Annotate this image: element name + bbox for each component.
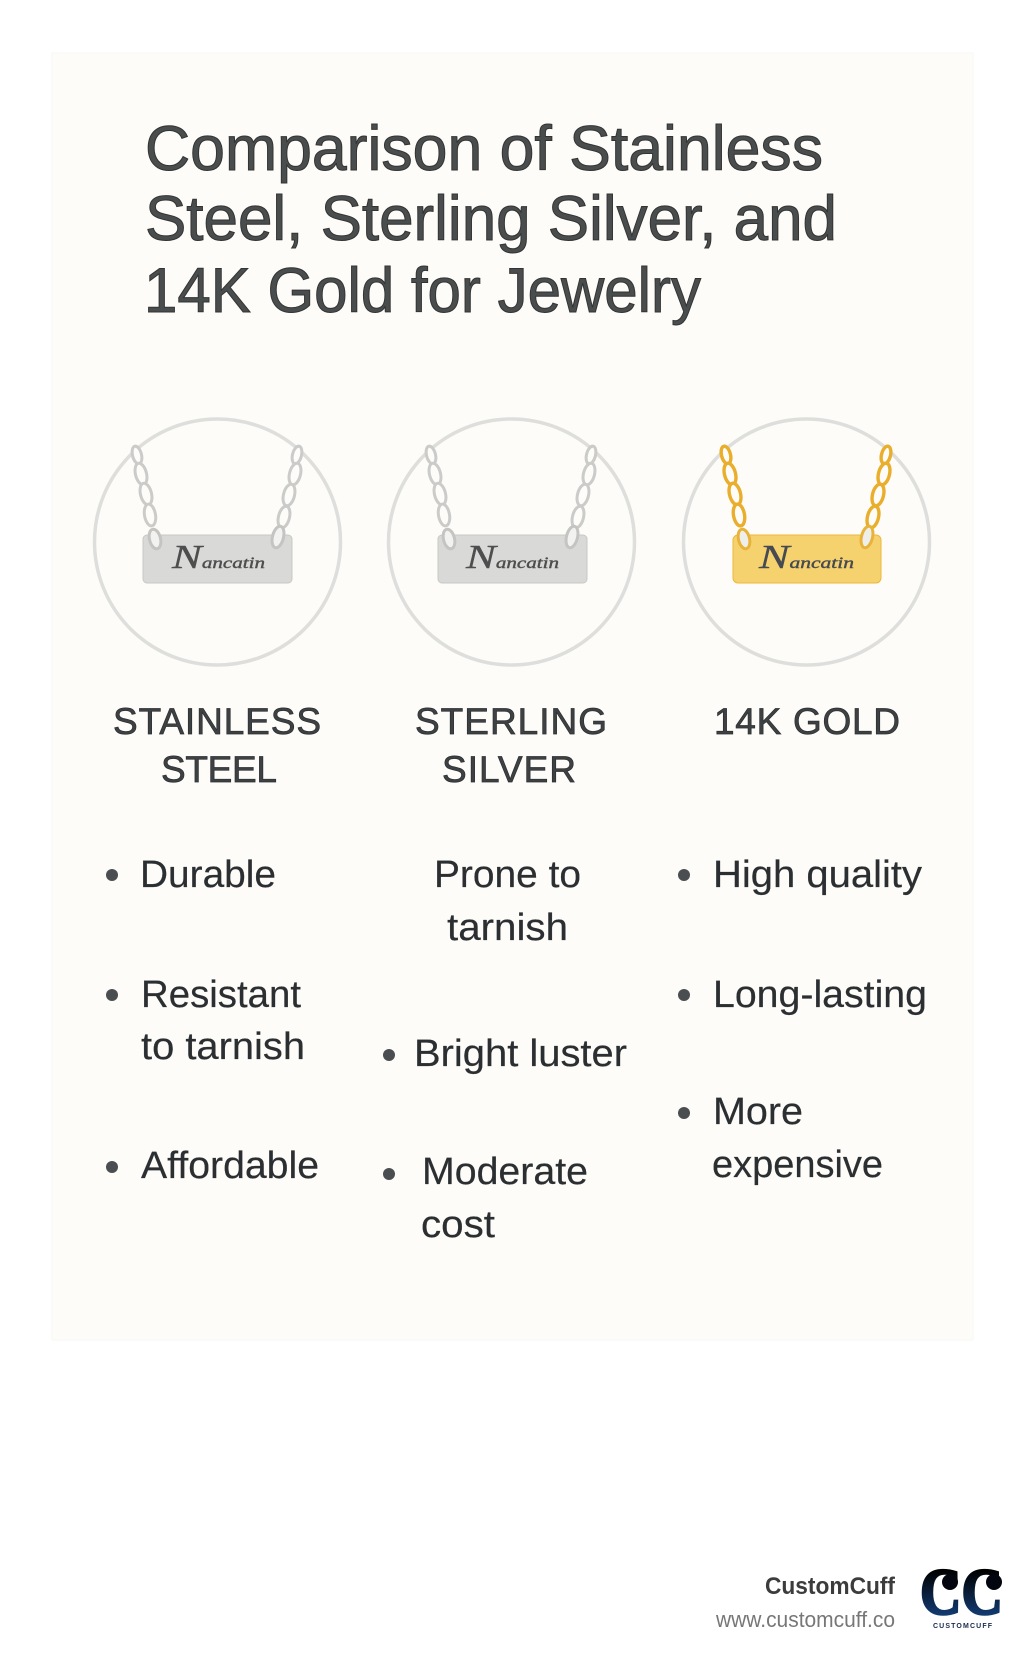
list: 14K gold properties: expensive: [712, 1144, 883, 1186]
list: 14K gold properties: Long-lasting: [713, 974, 927, 1016]
title: [144, 114, 837, 326]
heading: stainless steel: [113, 701, 321, 790]
list: sterling silver properties: Bright luster: [414, 1033, 627, 1075]
icon: stainless steel necklace: [94, 419, 340, 665]
heading: 14K gold: 14K GOLD: [714, 701, 900, 742]
heading: sterling silver: [415, 701, 607, 790]
icon: sterling silver necklace: [388, 419, 634, 665]
list: sterling silver properties: [383, 854, 627, 1246]
title: Comparison of Stainless: [145, 114, 823, 184]
list: sterling silver properties: Moderate: [422, 1151, 588, 1193]
footer brand text: [715, 1573, 896, 1632]
list: sterling silver properties: tarnish: [447, 907, 568, 949]
icon: gold necklace: N ancatin: [758, 539, 854, 576]
heading: sterling silver: SILVER: [442, 749, 576, 790]
panel: background: [52, 53, 973, 1340]
panel: stainless steel column: [94, 419, 340, 1187]
panel: 14K gold column: [678, 419, 930, 1186]
list: 14K gold properties: [678, 854, 927, 1186]
list: 14K gold properties: High quality: [713, 854, 922, 896]
list: sterling silver properties: cost: [421, 1204, 495, 1246]
heading: stainless steel: STAINLESS: [113, 701, 321, 742]
icon: CustomCuff logo: CC: [920, 1556, 1003, 1629]
icon: CustomCuff logo: CUSTOMCUFF: [933, 1623, 993, 1630]
list: 14K gold properties: More: [713, 1091, 803, 1133]
heading: sterling silver: STERLING: [415, 701, 607, 742]
icon: sterling silver necklace: N ancatin: [465, 539, 559, 576]
list: stainless steel properties: [106, 854, 319, 1187]
footer brand text: CustomCuff: [765, 1573, 896, 1600]
list: stainless steel properties: to tarnish: [141, 1026, 305, 1068]
icon: gold necklace: [684, 419, 930, 665]
icon: stainless steel necklace: N ancatin: [171, 539, 265, 576]
panel: sterling silver column: [383, 419, 634, 1246]
heading: stainless steel: STEEL: [161, 749, 277, 790]
list: sterling silver properties: Prone to: [434, 854, 581, 896]
footer brand text: www.customcuff.co: [715, 1607, 895, 1632]
title: 14K Gold for Jewelry: [144, 256, 701, 326]
list: stainless steel properties: Durable: [140, 854, 276, 896]
list: stainless steel properties: Affordable: [141, 1145, 319, 1187]
title: Steel, Sterling Silver, and: [145, 184, 837, 254]
list: stainless steel properties: Resistant: [141, 974, 301, 1016]
